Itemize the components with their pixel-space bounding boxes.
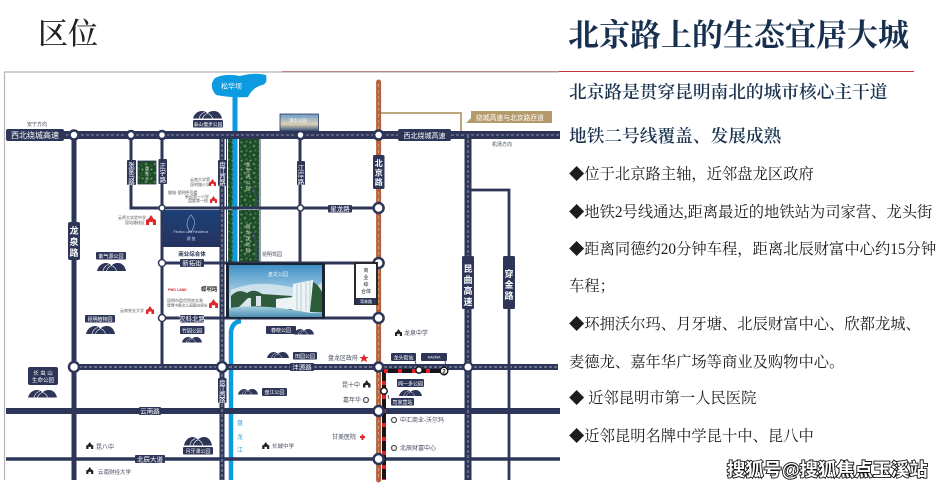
points of interest: 昆十中 [342, 381, 360, 389]
points of interest: 云南大学第 [190, 176, 210, 182]
park labels and icons: 田园公园 [295, 354, 315, 360]
park labels and icons [28, 111, 424, 455]
commercial complex label: 商业综合体 [178, 250, 206, 258]
park labels and icons: 竹园公园 [182, 327, 202, 334]
points of interest: PMO LAND [168, 288, 187, 292]
points of interest: 昆明路小学 [190, 181, 210, 187]
small park photo: 盘 [145, 165, 149, 171]
points of interest: 地 [246, 241, 251, 247]
project block: Pavilion: Pavilion Lake Residence [174, 230, 209, 234]
points of interest: 松华坝 [221, 82, 242, 90]
commercial complex box [355, 263, 377, 304]
road labels: 星龙路 [330, 204, 350, 213]
park labels and icons: 春晓公园 [271, 327, 291, 334]
road labels: 路 [69, 247, 79, 258]
road labels: 京 [375, 168, 383, 178]
points of interest: 融城·昆明呼号楼 [168, 189, 197, 195]
points of interest: 盘 [246, 223, 251, 229]
lake park photo [280, 114, 318, 131]
road labels [6, 129, 515, 464]
points of interest: 盘 [237, 419, 243, 427]
road labels: 云南路 [140, 406, 160, 416]
road labels: 张 [128, 160, 135, 169]
road labels: 西北绕城高速 [404, 131, 446, 140]
commercial complex box: 综 [363, 281, 369, 288]
bullet: driving distance: ◆距离同德约20分钟车程，距离北辰财富中心约15分钟 [569, 241, 936, 258]
road labels: 学 [159, 168, 166, 177]
road labels: 江 [298, 164, 305, 172]
location map [4, 71, 560, 482]
road labels: 农科北路 [179, 314, 206, 323]
Beijing Road [376, 82, 381, 480]
bullet: shopping: ◆环拥沃尔玛、月牙塘、北辰财富中心、欣都龙城、 [569, 316, 921, 333]
metro line 2 [384, 371, 444, 480]
points of interest [27, 82, 512, 476]
central park image [226, 263, 325, 318]
points of interest: 云南农业大学 [120, 307, 144, 313]
road labels: 穿 [504, 268, 514, 279]
road labels: 路 [504, 290, 514, 301]
points of interest: 机场方向 [492, 141, 512, 148]
points of interest: 建博中路北儿园面向原址 [167, 302, 208, 308]
road labels: 北辰大道 [137, 454, 164, 464]
points of interest: 昆八中 [96, 443, 114, 451]
road labels: 盘 [219, 378, 226, 387]
points of interest: 北辰财富中心 [400, 444, 436, 452]
points of interest: 蝶明路 [201, 285, 218, 293]
link line: ring expressway to Beijing Road [381, 111, 552, 131]
road network [6, 135, 560, 480]
road labels: 昆 [463, 264, 473, 274]
river: Panlong River and lake [212, 74, 266, 480]
road labels: 北 [375, 158, 383, 168]
road labels: 路 [298, 177, 305, 186]
points of interest: 江 [237, 447, 243, 454]
points of interest: 昆明市盘世贸房交易 [167, 297, 203, 303]
road labels: 家 [128, 166, 135, 175]
points of interest: 公 [246, 180, 251, 185]
points of interest: 长城中学 [272, 442, 295, 450]
metro stations: MAONA [428, 356, 441, 360]
points of interest: 金 [246, 161, 251, 167]
road labels: 路 [219, 396, 226, 404]
park labels and icons: 生命公园 [32, 376, 54, 384]
metro stations: 2 [442, 370, 446, 376]
road labels: 金 [504, 279, 514, 290]
points of interest: 昆站路校区 [125, 219, 145, 225]
road labels: 盘 [219, 160, 226, 169]
points of interest: 安宁方向 [27, 121, 47, 128]
road labels: 马 [128, 173, 135, 181]
road labels: 高 [463, 285, 473, 296]
road labels: 速 [463, 296, 473, 307]
metro stations: 龙头街站 [393, 354, 414, 361]
map frame [4, 72, 559, 480]
subheading: metro: 地铁二号线覆盖、发展成熟 [569, 126, 781, 146]
road labels: 新拓街 [182, 258, 202, 268]
points of interest: 盘旋第一校 [188, 197, 208, 203]
road labels: 曲 [463, 274, 473, 285]
small park photo: 公 [145, 176, 149, 181]
commercial complex box: 合体 [361, 288, 371, 295]
park labels and icons: 盘江公园 [264, 389, 285, 396]
central park image: 盘龙公园 [268, 271, 288, 278]
road labels: 路 [159, 175, 166, 184]
lake park photo: 滇水公园 [289, 117, 307, 124]
road labels: 路 [375, 177, 383, 187]
points of interest: 湾 [246, 173, 251, 180]
points of interest: 中汇商业-沃尔玛 [400, 416, 444, 424]
project block: Pavilion: 湖 玺 [186, 235, 196, 241]
bullet: schools: ◆近邻昆明名牌中学昆十中、昆八中 [569, 428, 814, 445]
road junctions [69, 130, 472, 464]
points of interest: 新迎第一小学 [185, 193, 209, 199]
bullet: location: ◆位于北京路主轴，近邻盘龙区政府 [569, 166, 814, 183]
metro stations [381, 353, 448, 406]
bullet: metro: ◆地铁2号线通达,距离最近的地铁站为司家营、龙头街 [569, 204, 932, 221]
link line: ring expressway to Beijing Road: 绕城高速与北京路匝道 [476, 113, 544, 122]
road labels: 江 [219, 385, 226, 393]
points of interest: 昆明驾园 [262, 251, 282, 258]
road labels: 西 [219, 391, 226, 399]
road labels: 西 [219, 173, 226, 181]
bullet: hospital: ◆ 近邻昆明市第一人民医院 [569, 390, 756, 407]
project block: Pavilion [163, 210, 220, 247]
points of interest: 云师大实验中学 [118, 214, 146, 220]
watermark: 搜狐号@搜狐焦点玉溪站 [727, 459, 928, 480]
metro stations: 司家营站 [392, 399, 413, 406]
park labels and icons: 昆明植物园 [87, 316, 113, 323]
points of interest: 龙 [246, 229, 251, 236]
heading: location: 区位 [38, 18, 98, 51]
road labels: 泉 [69, 236, 79, 247]
road labels: 龙 [69, 225, 79, 236]
points of interest: 云南财经大学 [98, 468, 132, 476]
road labels: 西北绕城高速 [11, 130, 59, 140]
points of interest: 宝 [246, 167, 251, 173]
points of interest: 园 [246, 186, 251, 192]
small park photo: 龙 [145, 170, 149, 176]
road labels: 路 [219, 178, 226, 187]
road labels: 路 [128, 178, 135, 186]
points of interest: 甘美医院 [332, 433, 356, 441]
park labels and icons: 月牙潭公园 [185, 448, 211, 455]
park labels and icons: 闻一多公园 [398, 380, 423, 387]
park labels and icons: 紫气源公园 [98, 253, 124, 260]
title rule [282, 71, 914, 72]
road labels: 江 [219, 167, 226, 175]
park labels and icons: 长 虫 山 [33, 369, 53, 377]
points of interest: 盘龙区政府 [328, 354, 358, 362]
commercial complex box: 弯林路 [360, 298, 372, 304]
title: 北京路上的生态宜居大城 [568, 18, 909, 53]
points of interest: 嘉年华 [343, 396, 361, 404]
subheading: Beijing Road: 北京路是贯穿昆明南北的城市核心主干道 [569, 82, 887, 102]
road labels: 正 [159, 162, 166, 170]
green belts [226, 139, 260, 262]
road labels: 沣源路 [292, 362, 312, 372]
points of interest: 园 [246, 248, 251, 254]
small park photo [138, 161, 156, 184]
park labels and icons: 泰山慢步公园 [194, 121, 223, 128]
commercial complex box: 商 [363, 267, 369, 274]
commercial complex box: 业 [363, 274, 369, 281]
points of interest: 龙 [237, 433, 243, 441]
road labels: 岸 [298, 171, 305, 179]
points of interest: 龙泉中学 [404, 329, 428, 337]
points of interest: 湿 [246, 235, 251, 242]
bullet: shopping continued: 麦德龙、嘉年华广场等商业及购物中心。 [569, 354, 844, 371]
bullet: driving distance continued: 车程； [569, 278, 615, 295]
